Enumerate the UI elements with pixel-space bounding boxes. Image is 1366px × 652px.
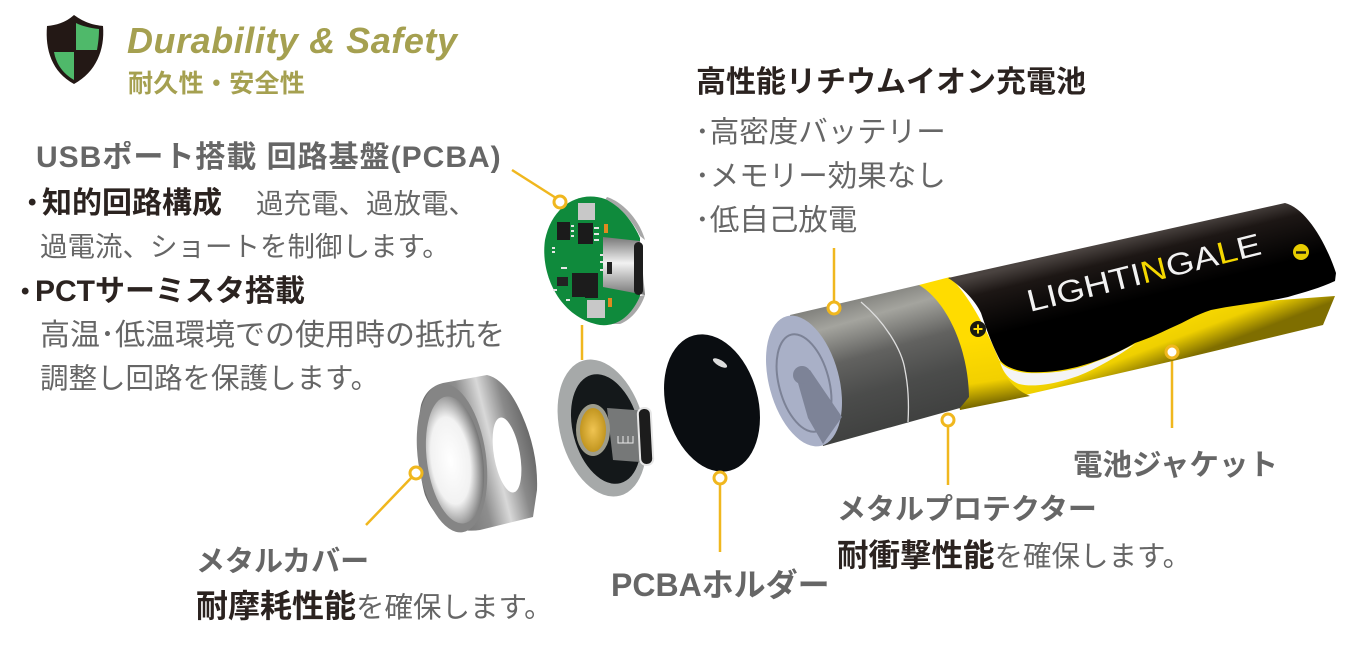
PCBA holder: [543, 350, 661, 506]
bullet: PCT thermistor: •: [21, 278, 29, 305]
callout line: PCBA holder: [719, 484, 721, 552]
callout line: lithium-ion cell: [833, 248, 835, 304]
label: jacket: 電池ジャケット: [1073, 449, 1278, 482]
text: no memory: ･メモリー効果なし: [695, 160, 946, 193]
bullet: intelligent circuit: •: [28, 189, 36, 216]
marker: metal protector: [942, 414, 954, 426]
callout line: metal cover: [366, 477, 412, 525]
text: PCT description line 2: 調整し回路を保護します。: [40, 363, 379, 395]
label: metal protector: メタルプロテクター: [837, 494, 1097, 526]
battery jacket yellow: [960, 296, 1335, 410]
text: PCT thermistor: PCTサーミスタ搭載: [35, 275, 305, 308]
minus mark: [1293, 244, 1309, 260]
text: low self discharge: ･低自己放電: [695, 204, 857, 237]
marker: PCBA: [554, 196, 566, 208]
black PCBA holder cap: [649, 323, 775, 483]
text: intelligent circuit description: 過充電、過放電、: [256, 188, 476, 219]
metal protector: [790, 285, 969, 446]
text: metal protector description: 耐衝撃性能を確保します。: [837, 537, 1191, 573]
text: intelligent circuit heading: 知的回路構成: [42, 187, 222, 220]
callout line: metal protector: [947, 426, 949, 485]
marker: PCBA holder: [714, 472, 726, 484]
label: lithium-ion: 高性能リチウムイオン充電池: [696, 66, 1086, 99]
text: PCT description line 1: 高温･低温環境での使用時の抵抗を: [40, 319, 505, 352]
connector line between PCBA and holder: [581, 325, 583, 360]
black sleeve: [948, 203, 1336, 372]
metal cover ring: [408, 375, 537, 537]
text: metal cover description: 耐摩耗性能を確保します。: [196, 588, 553, 624]
subheading: 耐久性・安全性: [128, 70, 305, 98]
callout line: jacket: [1171, 358, 1173, 428]
text: intelligent circuit line 2: 過電流、ショートを制御します。: [40, 231, 450, 262]
yellow band: [919, 277, 1030, 410]
marker: lithium-ion cell: [828, 302, 840, 314]
battery: [753, 203, 1336, 455]
brand logo: LIGHTI NGALE: [1023, 227, 1265, 319]
label: PCBA holder: PCBAホルダー: [611, 567, 830, 603]
white swoosh: [1000, 344, 1135, 385]
label: USB PCBA: USBポート搭載 回路基盤(PCBA): [36, 141, 502, 174]
heading: Durability & Safety: Durability & Safety: [127, 20, 458, 61]
PCBA board: [544, 196, 645, 325]
icon: shield: [47, 15, 103, 84]
marker: jacket: [1166, 346, 1178, 358]
plus mark: [970, 321, 986, 337]
text: high density: ･高密度バッテリー: [695, 116, 946, 149]
label: metal cover: メタルカバー: [196, 546, 369, 578]
battery end face: [753, 307, 855, 455]
callout line: PCBA: [512, 170, 556, 198]
marker: metal cover: [410, 467, 422, 479]
